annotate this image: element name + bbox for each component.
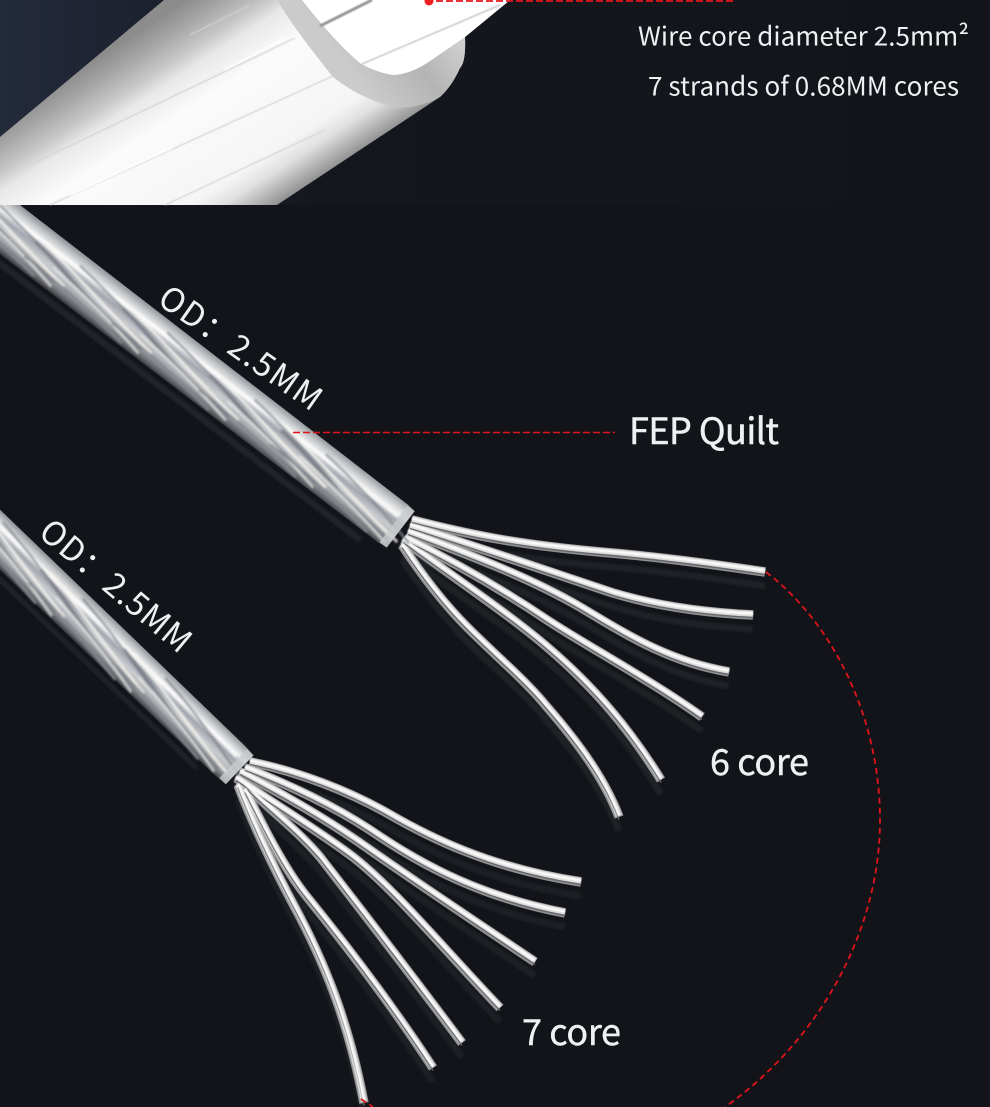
red dashed line: top [424, 0, 733, 6]
text: wire core specs: 7 strands of 0.68MM cores [648, 66, 959, 104]
wire reflections [402, 534, 765, 831]
tube ring end [277, 0, 465, 108]
red dashed arc connecting core ends [361, 572, 880, 1107]
text: wire core specs [638, 16, 969, 104]
wire highlights [236, 760, 581, 1102]
top cable close-up illustration [0, 0, 510, 205]
label: OD 2.5MM lower: OD：2.5MM [31, 506, 204, 662]
7 core wires [236, 760, 581, 1107]
top band background [0, 0, 990, 205]
label: 6 core: 6 core [710, 734, 809, 786]
label: 7 core: 7 core [522, 1004, 621, 1056]
wire highlights [402, 518, 765, 816]
wire body [402, 519, 765, 816]
outer translucent tube [0, 0, 510, 205]
6 core wires [402, 518, 765, 831]
cable 1 FEP sheath [0, 205, 415, 548]
cable 2 FEP sheath [0, 483, 257, 794]
label: OD 2.5MM upper: OD：2.5MM [150, 272, 333, 420]
wire bases [402, 520, 765, 817]
text: wire core specs: Wire core diameter 2.5mm² [638, 16, 969, 54]
wire groove [402, 522, 765, 820]
wire body [236, 761, 581, 1102]
inner conductor [302, 0, 510, 75]
FEP leader line [293, 432, 615, 434]
wire bases [236, 762, 581, 1103]
wire groove [236, 764, 581, 1106]
wire reflections [236, 776, 581, 1107]
label: FEP Quilt: FEP Quilt [629, 403, 779, 455]
